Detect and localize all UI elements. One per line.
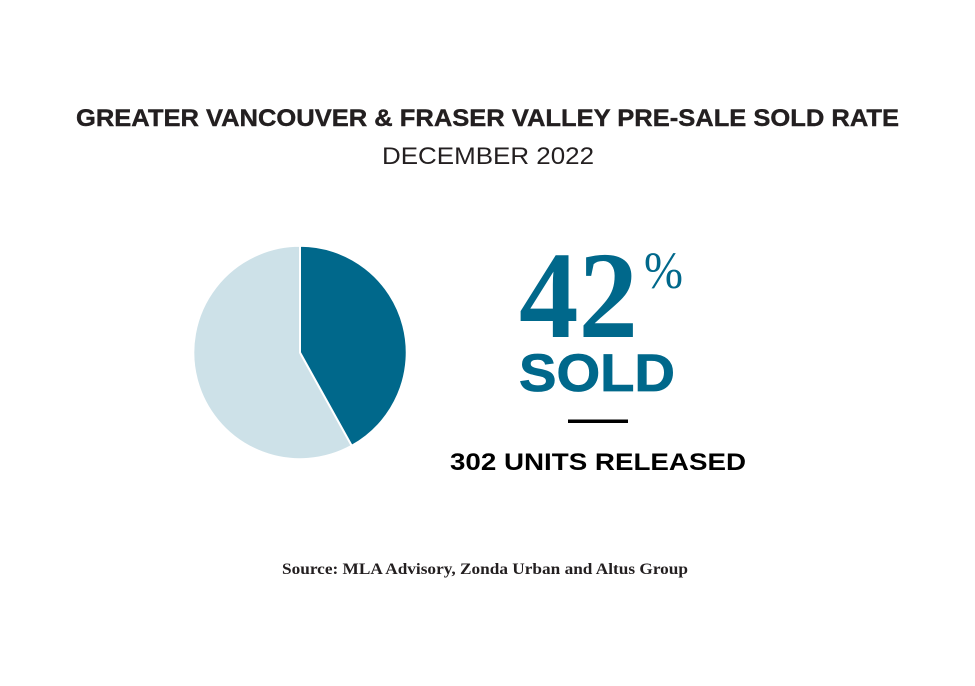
source note: Source: MLA Advisory, Zonda Urban and Altus Group bbox=[282, 561, 688, 578]
percent sign: % bbox=[644, 243, 683, 300]
pie chart: 42% sold bbox=[193, 246, 407, 459]
subtitle: date: DECEMBER 2022 bbox=[382, 143, 594, 170]
divider bar bbox=[568, 420, 628, 423]
label SOLD: SOLD bbox=[519, 344, 675, 403]
units released: 302 UNITS RELEASED bbox=[450, 449, 746, 476]
big number 42: 42 bbox=[519, 227, 638, 364]
title: GREATER VANCOUVER & FRASER VALLEY PRE-SALE SOLD RATE bbox=[76, 105, 899, 132]
stat: 42 percent sold bbox=[519, 227, 683, 403]
pie slice: sold 42% bbox=[300, 246, 407, 446]
pie slice: unsold 58% bbox=[193, 246, 352, 459]
